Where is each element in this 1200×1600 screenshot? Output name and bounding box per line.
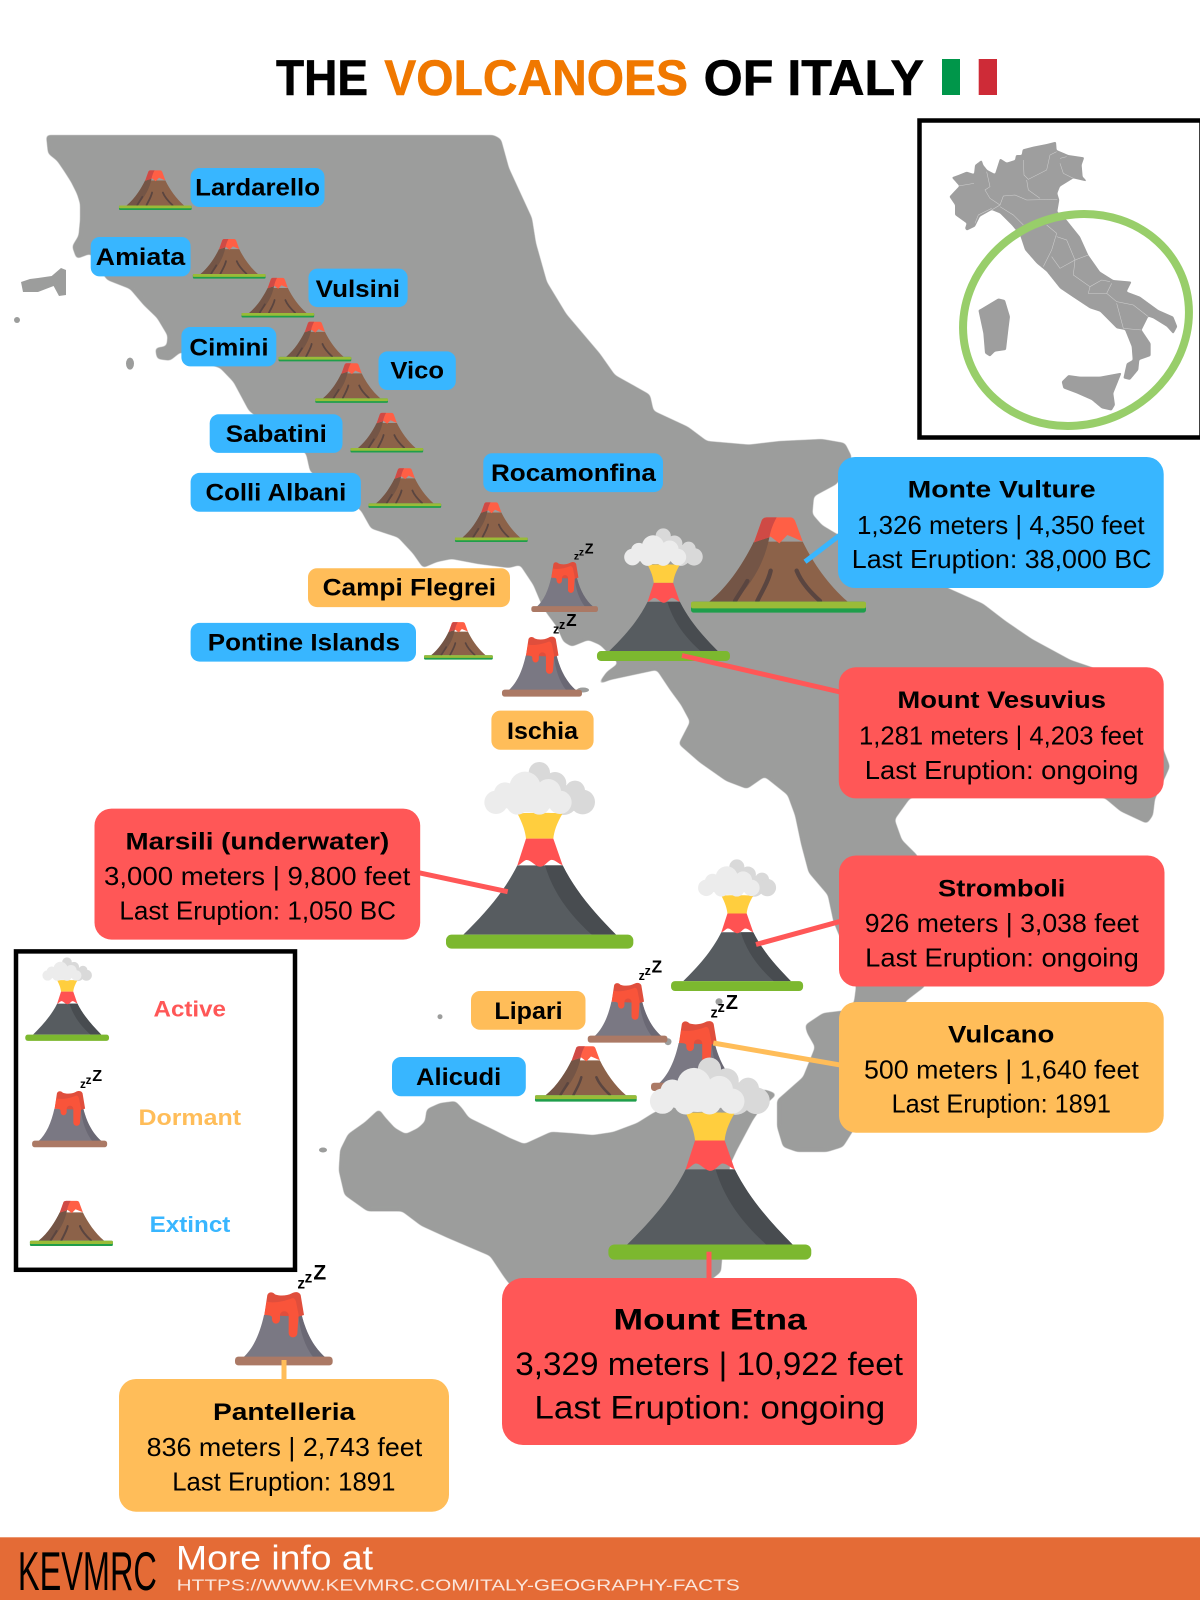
label: Rocamonfina xyxy=(483,453,663,492)
label: Campi Flegrei: Campi Flegrei xyxy=(323,574,496,601)
volcano: Vico (extinct) xyxy=(315,363,388,403)
label: Colli Albani: Colli Albani xyxy=(206,480,346,507)
footer URL: HTTPS://WWW.KEVMRC.COM/ITALY-GEOGRAPHY-FACTS xyxy=(177,1578,740,1595)
connector: Mount Etna xyxy=(706,1252,712,1280)
label: Campi Flegrei xyxy=(308,568,510,607)
label: Alicudi: Alicudi xyxy=(416,1064,501,1091)
footer xyxy=(0,1537,1200,1600)
text: last eruption: Last Eruption: 1891 xyxy=(892,1089,1111,1119)
label: Amiata: Amiata xyxy=(96,244,186,271)
text: last eruption: Last Eruption: ongoing xyxy=(534,1389,885,1425)
map: southern Italy and Sicily xyxy=(14,135,1170,1300)
text: height: 836 meters | 2,743 feet xyxy=(147,1432,423,1462)
volcano: Pantelleria (dormant): z xyxy=(305,1270,313,1287)
volcano: Ischia (dormant): z xyxy=(553,623,559,637)
legend icon: dormant xyxy=(32,1067,107,1147)
label: Lardarello: Lardarello xyxy=(195,175,320,202)
connector: Mount Vesuvius xyxy=(682,656,840,692)
text: height: 3,329 meters | 10,922 feet xyxy=(515,1346,903,1382)
label: Vulsini: Vulsini xyxy=(316,276,400,303)
legend icon: dormant: z xyxy=(80,1078,86,1091)
heading: Monte Vulture: Monte Vulture xyxy=(908,476,1096,504)
volcano: Pontine Islands (extinct) xyxy=(424,622,493,660)
label: Sabatini: Sabatini xyxy=(226,421,327,448)
highlight ring around the south of Italy xyxy=(929,178,1200,462)
heading: Pantelleria: Pantelleria xyxy=(213,1399,356,1426)
volcano: Pantelleria (dormant) xyxy=(235,1261,333,1365)
connector: Vulcano xyxy=(713,1043,842,1065)
legend icon: extinct xyxy=(30,1201,113,1246)
label: Ischia xyxy=(491,711,594,750)
panel: Stromboli xyxy=(839,856,1164,986)
label: Rocamonfina: Rocamonfina xyxy=(491,460,657,487)
volcano: Lipari (dormant): z xyxy=(645,964,651,978)
volcano: Campi Flegrei (dormant): z xyxy=(574,551,579,562)
volcano: Campi Flegrei (dormant) xyxy=(531,541,598,612)
panel: Marsili xyxy=(94,809,420,940)
heading: Marsili (underwater): Marsili (underwater) xyxy=(126,828,389,855)
heading: Vulcano: Vulcano xyxy=(948,1021,1054,1048)
label: Lipari xyxy=(471,991,586,1030)
volcano: Lipari (dormant) xyxy=(588,956,667,1043)
volcano: Pantelleria (dormant): Z xyxy=(313,1261,326,1284)
connector: Stromboli xyxy=(756,921,841,944)
text: last eruption: Last Eruption: ongoing xyxy=(865,755,1138,785)
legend label: Active: Active xyxy=(154,997,226,1022)
text: last eruption: Last Eruption: 1891 xyxy=(172,1467,395,1497)
volcano: Vulcano (dormant): z xyxy=(710,1006,718,1022)
volcano: Cimini (extinct) xyxy=(279,322,351,361)
volcano: Rocamonfina (extinct) xyxy=(455,502,528,542)
volcano: Ischia (dormant): z xyxy=(559,618,565,632)
title: THE xyxy=(276,50,368,106)
volcano: Campi Flegrei (dormant): z xyxy=(579,548,584,559)
volcano: Campi Flegrei (dormant): Z xyxy=(585,541,594,557)
panel: Pantelleria xyxy=(119,1379,449,1512)
panel: Vulcano xyxy=(839,1002,1164,1133)
label: Cimini xyxy=(181,327,276,366)
map: whole of Italy xyxy=(949,142,1177,411)
volcano: Mount Vesuvius (active) xyxy=(597,528,730,661)
text: last eruption: Last Eruption: ongoing xyxy=(865,942,1139,972)
text: height: 926 meters | 3,038 feet xyxy=(865,908,1140,938)
legend icon: dormant: Z xyxy=(92,1067,102,1085)
text: last eruption: Last Eruption: 1,050 BC xyxy=(119,896,396,926)
label: Lipari: Lipari xyxy=(494,998,563,1025)
title: OF ITALY xyxy=(704,50,924,106)
volcano: Stromboli (active) xyxy=(671,859,803,991)
label: Cimini: Cimini xyxy=(189,335,269,362)
volcano: Vulcano (dormant): Z xyxy=(726,992,738,1014)
heading: Stromboli: Stromboli xyxy=(938,875,1065,902)
connector: Marsili xyxy=(418,873,508,892)
text: height: 500 meters | 1,640 feet xyxy=(864,1054,1140,1084)
legend label: Extinct: Extinct xyxy=(150,1212,231,1237)
volcano: Ischia (dormant): Z xyxy=(566,610,577,630)
text: last eruption: Last Eruption: 38,000 BC xyxy=(852,544,1152,574)
label: Pontine Islands: Pontine Islands xyxy=(208,630,400,657)
label: Pontine Islands xyxy=(191,623,416,662)
volcano: Lipari (dormant): z xyxy=(639,969,645,983)
heading: Mount Vesuvius: Mount Vesuvius xyxy=(897,687,1106,714)
connector: Pantelleria xyxy=(282,1360,286,1381)
volcano: Colli Albani (extinct) xyxy=(368,468,441,508)
panel: inset map of Italy xyxy=(920,120,1200,462)
text: height: 1,281 meters | 4,203 feet xyxy=(859,720,1144,750)
label: Vico xyxy=(378,351,456,390)
volcano: Ischia (dormant) xyxy=(502,610,582,697)
footer heading: More info at xyxy=(176,1539,374,1577)
volcano: Monte Vulture (extinct) xyxy=(691,517,866,613)
panel: Mount Etna xyxy=(502,1278,917,1445)
volcano: Vulsini (extinct) xyxy=(241,278,314,318)
text: height: 1,326 meters | 4,350 feet xyxy=(857,510,1145,540)
heading: Mount Etna: Mount Etna xyxy=(614,1303,807,1336)
connector: Monte Vulture xyxy=(805,535,840,562)
legend icon: active xyxy=(25,957,109,1041)
volcano: Alicudi (extinct) xyxy=(535,1046,637,1102)
volcano: Amiata (extinct) xyxy=(193,239,266,279)
label: Ischia: Ischia xyxy=(507,718,579,745)
label: Vico: Vico xyxy=(390,358,444,385)
volcano: Marsili (active) xyxy=(446,762,633,949)
panel: Mount Vesuvius xyxy=(839,667,1164,798)
label: Sabatini xyxy=(210,414,342,453)
panel: legend xyxy=(16,951,295,1270)
title xyxy=(276,50,997,106)
volcano: Sabatini (extinct) xyxy=(350,413,423,453)
label: Amiata xyxy=(91,237,191,276)
title: VOLCANOES xyxy=(384,50,688,106)
volcano: Pantelleria (dormant): z xyxy=(297,1275,305,1292)
text: height: 3,000 meters | 9,800 feet xyxy=(104,861,411,891)
label: Colli Albani xyxy=(191,473,361,512)
volcano: Lipari (dormant): Z xyxy=(652,956,662,976)
volcano: Vulcano (dormant): z xyxy=(717,1000,725,1016)
label: Vulsini xyxy=(308,269,408,307)
label: Lardarello xyxy=(191,168,324,207)
legend icon: dormant: z xyxy=(86,1074,92,1087)
volcano: Lardarello (extinct) xyxy=(119,170,192,210)
label: Alicudi xyxy=(392,1057,526,1096)
volcano: Vulcano (dormant) xyxy=(651,992,744,1091)
volcano: Mount Etna (active) xyxy=(608,1057,811,1260)
panel: Monte Vulture xyxy=(838,457,1164,588)
legend label: Dormant: Dormant xyxy=(138,1105,242,1130)
